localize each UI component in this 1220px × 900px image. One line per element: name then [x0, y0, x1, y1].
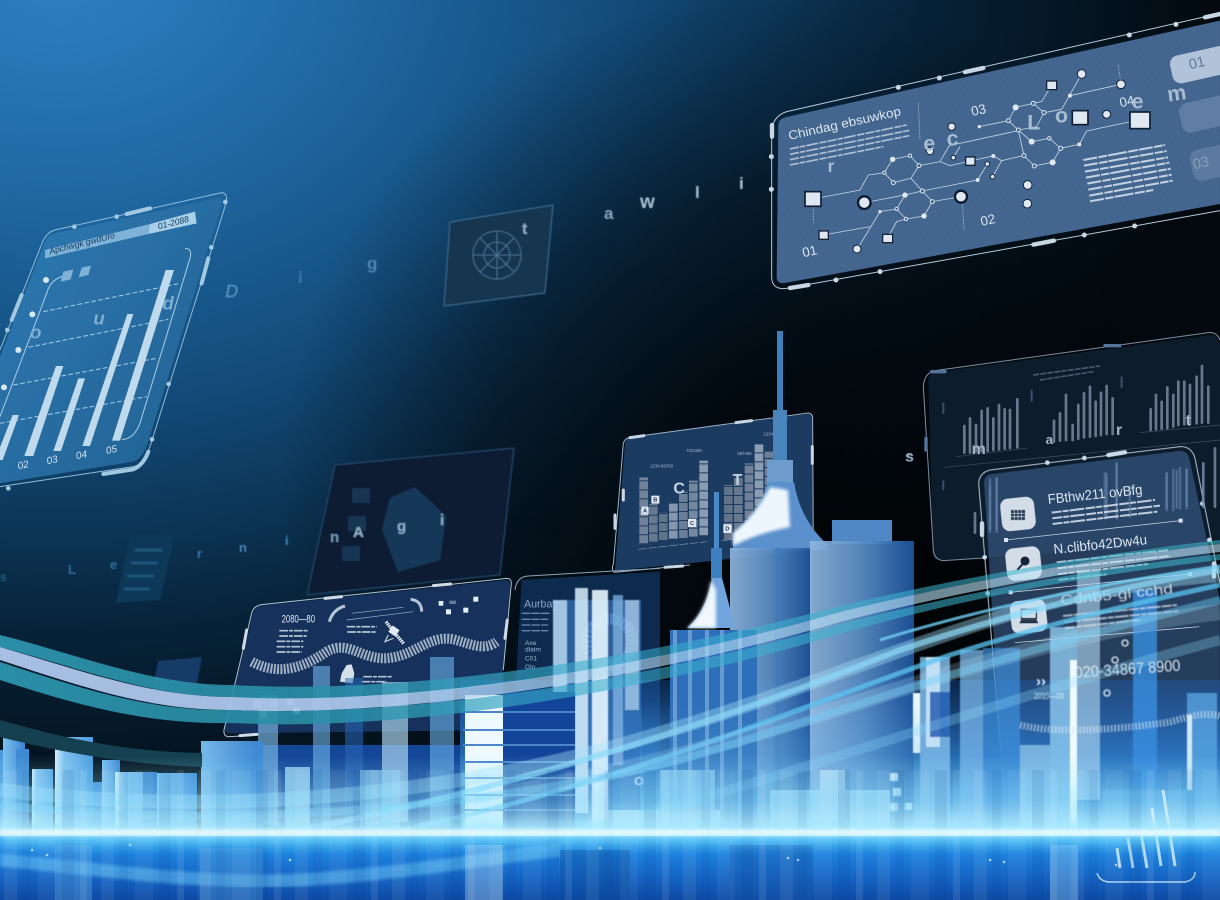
chart captions: 087455 [737, 451, 752, 456]
floating word letters: i [298, 268, 303, 287]
stacked block building [463, 692, 575, 832]
bar labels: 05 [105, 444, 119, 457]
icon: satellite [385, 622, 404, 644]
right side tabs: 01 [1187, 54, 1207, 73]
panel: dim hexagon radar: g [397, 518, 406, 535]
highlighted cells: C [690, 521, 694, 527]
panel: gauge, behind city: Axe [525, 640, 537, 647]
panel: dark bar charts, right [905, 333, 1220, 561]
floating word letters: r [197, 546, 202, 561]
second wave graphic [1020, 714, 1220, 730]
letter t: t [522, 221, 528, 238]
panel: dim hexagon radar: A [353, 524, 364, 541]
icon: robot arm [340, 664, 354, 683]
numbers 01 to 04: 03 [970, 101, 987, 119]
panel: dim hexagon radar: i [440, 512, 444, 529]
light streams [0, 540, 1220, 835]
floating letters: e [1132, 89, 1144, 113]
highlighted cells: A [643, 509, 647, 515]
floating word letters: e [110, 557, 117, 572]
bar labels: 04 [75, 449, 89, 462]
reflected bar chart [1097, 790, 1195, 882]
floating word letters: l [695, 183, 700, 202]
floating word letters: i [739, 174, 744, 193]
wave graphic [252, 639, 497, 669]
data squares [439, 597, 478, 614]
highlighted cells: B [653, 498, 657, 504]
floating word letters: s [0, 570, 7, 584]
floating letters: L [1027, 110, 1040, 134]
main tower with spire [730, 331, 828, 838]
floating letters: r [828, 156, 835, 176]
panel title: Chindag ebsuwkop [787, 104, 902, 143]
dim teal band, far left [0, 720, 202, 767]
letters n A g i: n [330, 529, 339, 546]
water reflection [0, 790, 1220, 900]
phone number text: 020-34867 8900 [1074, 658, 1181, 682]
sparkles [32, 845, 1116, 865]
list heading 1: FBthw211 ovBfg [1047, 481, 1143, 507]
floating word letters: a [155, 552, 163, 567]
floating letters: o [30, 321, 41, 342]
small lit cubes [890, 773, 912, 811]
small tower with spire [670, 492, 757, 840]
highlighted cells: F [787, 490, 791, 496]
city skyline [0, 331, 1217, 841]
floating letters m a r t s: m [972, 441, 986, 458]
bar labels: 03 [46, 454, 59, 467]
highlighted cells [641, 487, 793, 533]
panel: service list, right foreground [979, 447, 1220, 900]
list text 2 [1057, 550, 1170, 580]
low mid blocks [600, 770, 890, 832]
floating letters: c [947, 126, 959, 150]
overlay panel text on city [598, 580, 1220, 784]
date label with chevrons: ›› [1036, 673, 1046, 690]
wide block building [810, 520, 914, 841]
list text 1 [1052, 500, 1160, 524]
floating letters m a r t s [905, 412, 1192, 466]
panel: small dim list [116, 533, 175, 603]
floating letters: o [1055, 104, 1068, 128]
middle glow [640, 700, 920, 836]
city glow base [204, 680, 1220, 837]
chart header bar: 01-2088 [157, 214, 190, 231]
panel: large circuit diagram, top right [771, 13, 1220, 289]
panel: small dim tile [150, 657, 202, 704]
gauge arcs [329, 599, 422, 622]
left mid towers [201, 657, 454, 838]
floating word letters [0, 174, 744, 584]
thin bright streams [0, 566, 1220, 835]
chart captions: 1234-56780 [650, 464, 674, 469]
floating word letters: a [604, 204, 614, 223]
floating letters m a r t s: t [1186, 412, 1192, 429]
floating letters m a r t s: a [1046, 432, 1054, 447]
floating word letters: L [68, 562, 76, 577]
panel: bar chart, left [0, 193, 238, 488]
far left buildings [0, 737, 197, 835]
teal band, lower [0, 554, 1220, 724]
chart header bar [45, 212, 197, 258]
vertical light streaks [0, 770, 1220, 900]
right side tabs: 03 [1191, 154, 1211, 173]
grid columns [644, 444, 788, 543]
numbers 01 to 04: 01 [801, 242, 818, 260]
circuit network [813, 65, 1138, 249]
floating word letters: w [639, 192, 655, 213]
panel title: Aurbay [524, 598, 558, 610]
list heading 2: N.clibfo42Dw4u [1053, 531, 1148, 557]
chart header bar: Apchwgk gwdUro [47, 230, 116, 257]
numbers 01 to 04: 02 [979, 211, 997, 229]
horizon haze [0, 755, 1220, 837]
floating letters: d [162, 292, 174, 313]
floating letters m a r t s: r [1116, 422, 1122, 439]
panel: heat grid chart: s [906, 449, 914, 465]
panel body text left [790, 125, 909, 165]
lavender band [0, 544, 1220, 711]
date label 2010: 2010—00 [1034, 691, 1064, 701]
teal band, upper [0, 540, 1220, 699]
panel text [277, 627, 392, 682]
right buildings [890, 570, 1217, 838]
floating letters [30, 280, 238, 342]
panel: satellite and wave [224, 578, 511, 737]
list text 3 [1063, 605, 1178, 628]
icon: magnifier [1004, 546, 1043, 582]
panel: dim radar [444, 205, 553, 306]
floating word letters: n [239, 540, 247, 555]
floating letters: T [733, 472, 743, 489]
panel: gauge, behind city [510, 568, 660, 783]
list heading 3: Cdnb5-gl cchd [1060, 580, 1174, 608]
highlighted cells: D [725, 527, 729, 533]
right side tabs [1168, 40, 1220, 183]
chart captions: 1234-5780 [763, 432, 785, 437]
chart captions [650, 432, 785, 469]
cylinder cluster [553, 588, 641, 830]
numbers 01 to 04: 04 [1118, 92, 1136, 110]
floating letters [828, 80, 1188, 176]
bar labels [17, 444, 119, 472]
horizon glow line [0, 824, 1220, 842]
floating letters [673, 472, 743, 497]
panel: gauge, behind city: Glo [525, 664, 536, 671]
axis labels [943, 377, 1122, 490]
chart captions: C02345 [687, 448, 702, 453]
floating letters m a r t s: s [905, 449, 914, 466]
numbers 01 to 04 [801, 92, 1136, 260]
date label: 2080—80 [282, 613, 315, 625]
floating letters: C [673, 480, 685, 497]
bar labels: 02 [17, 459, 30, 472]
floating letters: D [225, 280, 238, 301]
floating letters: e [923, 132, 935, 156]
panel body text right [1083, 145, 1173, 201]
icon: calendar [999, 496, 1037, 532]
bars [0, 270, 174, 460]
panel: gauge, behind city: C01 [525, 656, 537, 663]
rings and callout [598, 640, 1128, 784]
floating word letters: g [367, 254, 377, 273]
icon: laptop [1009, 598, 1048, 634]
floating word letters: i [285, 533, 289, 548]
panel: gauge, behind city: dlaim [525, 647, 541, 654]
floating letters: m [1166, 80, 1188, 107]
floating letters: u [93, 307, 105, 328]
panel: heat grid chart [612, 413, 914, 572]
panel: dim hexagon radar [307, 448, 514, 595]
